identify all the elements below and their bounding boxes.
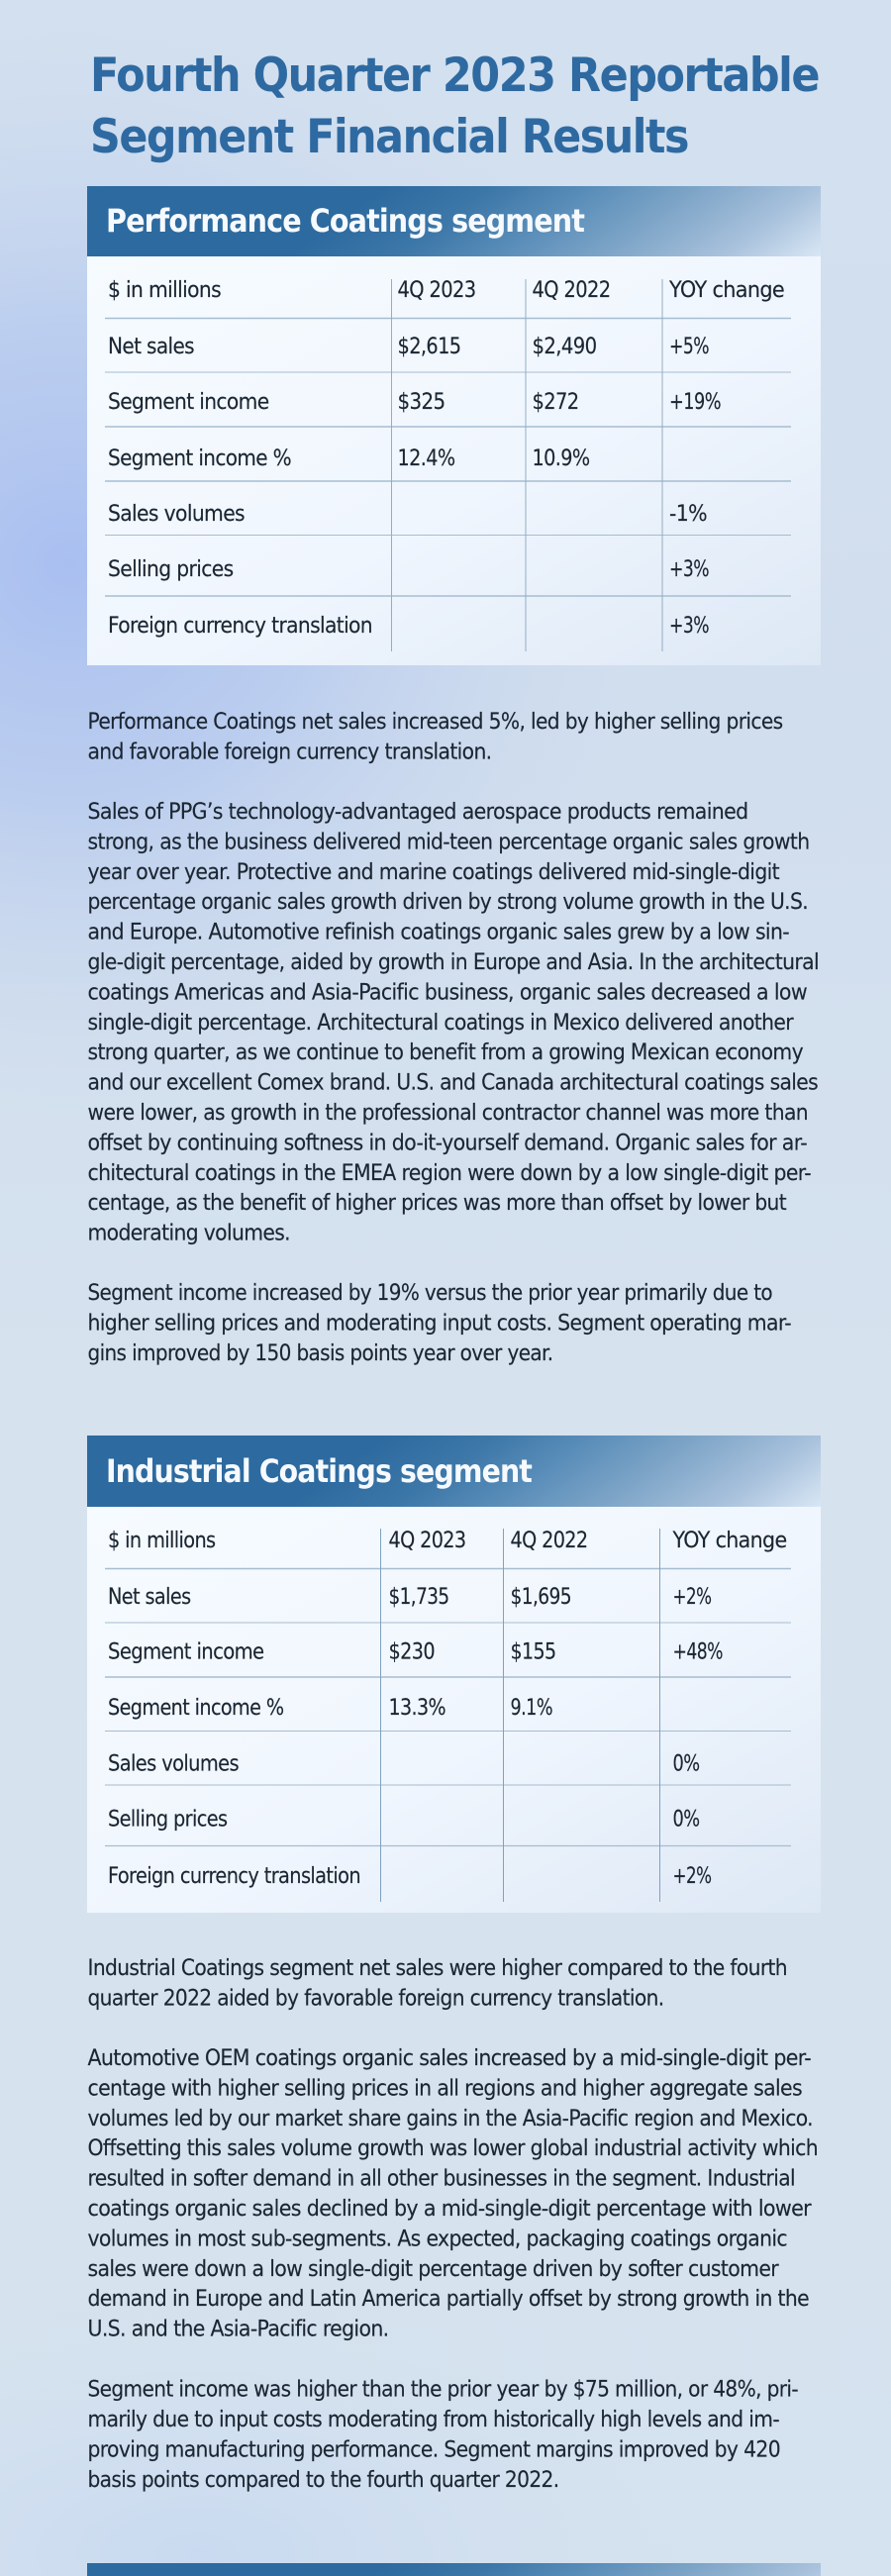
text block: Performance Coatings net sales summary: Performance Coatings net sales increased 5%, led by higher selling prices [87,710,783,735]
table column: 4Q 2022: 4Q 2022 [511,1529,588,1553]
table column: 4Q 2022: $155 [511,1640,556,1665]
table row labels: Segment income % [108,1696,283,1721]
table column: YOY change: +19% [669,390,721,415]
table column: 4Q 2022: 9.1% [511,1696,552,1721]
text block: Performance Coatings business detail [87,800,819,1246]
table column: 4Q 2022: 4Q 2022 [533,278,610,303]
title: Fourth Quarter 2023 Reportable [90,49,819,103]
table row labels: Foreign currency translation [108,614,372,639]
text block: Industrial Coatings segment income: marily due to input costs moderating from historically high levels and im- [87,2408,779,2432]
text block: Industrial Coatings business detail [87,2046,818,2342]
table column: 4Q 2022 [511,1529,588,1721]
table column: YOY change: YOY change [668,278,784,303]
text block: Industrial Coatings business detail: U.S. and the Asia-Pacific region. [87,2318,388,2342]
text block: Industrial Coatings segment income [87,2378,798,2493]
text block: Industrial Coatings net sales summary: Industrial Coatings segment net sales were higher compared to the fourth [87,1956,787,1981]
table row labels: $ in millions [108,1529,216,1553]
table row labels: Segment income [108,1640,264,1665]
table row labels: Net sales [108,1585,191,1610]
table column: 4Q 2022 [533,278,610,471]
text block: Performance Coatings segment income: higher selling prices and moderating input costs. Segment operating mar- [87,1311,791,1337]
text block: Performance Coatings business detail: single-digit percentage. Architectural coatings in Mexico delivered another [87,1011,795,1036]
table row labels: Foreign currency translation [108,1864,360,1889]
text block: Performance Coatings business detail: and our excellent Comex brand. U.S. and Canada architectural coatings sales [87,1071,818,1096]
table column: 4Q 2023 [388,1529,465,1721]
panel header: Performance Coatings segment [87,186,821,256]
table column: 4Q 2023: 13.3% [388,1696,446,1721]
text block: Performance Coatings business detail: were lower, as growth in the professional contractor channel was more than [87,1101,808,1126]
table column: YOY change: 0% [673,1808,699,1833]
text block: Performance Coatings business detail: year over year. Protective and marine coatings delivered mid-single-digit [87,860,780,885]
text block: Performance Coatings business detail: coatings Americas and Asia-Pacific business, organic sales decreased a low [87,980,808,1005]
text block: Industrial Coatings business detail: sales were down a low single-digit percentage driven by softer customer [87,2257,780,2282]
table column: YOY change [668,278,784,639]
panel header: Industrial Coatings segment: Industrial Coatings segment [106,1452,533,1490]
table row labels: Net sales [108,335,194,359]
table column: YOY change: YOY change [672,1529,787,1553]
panel header: Industrial Coatings segment [87,1436,821,1507]
table column: 4Q 2023: 12.4% [398,446,455,471]
title [90,49,819,164]
text block: Industrial Coatings business detail: demand in Europe and Latin America partially offset by strong growth in the [87,2287,809,2312]
text block: Industrial Coatings net sales summary [87,1956,787,2012]
text block: Industrial Coatings segment income: basis points compared to the fourth quarter 2022. [87,2468,558,2493]
table column: YOY change: +3% [669,557,709,582]
table column: YOY change: +48% [673,1640,723,1665]
text block: Industrial Coatings business detail: volumes in most sub-segments. As expected, packaging coatings organic [87,2227,787,2251]
text block: Performance Coatings business detail: gle-digit percentage, aided by growth in Europe and Asia. In the architectural [87,950,819,975]
panel header: next segment (cut off at page edge) [87,2563,821,2576]
text block: Industrial Coatings business detail: coatings organic sales declined by a mid-single-digit percentage with lower [87,2197,813,2222]
table row labels [108,1529,360,1889]
text block: Industrial Coatings business detail: centage with higher selling prices in all regions and higher aggregate sales [87,2076,802,2101]
text block: Performance Coatings business detail: strong, as the business delivered mid-teen percentage organic sales growth [87,830,810,854]
text block: Performance Coatings business detail: and Europe. Automotive refinish coatings organic sales grew by a low sin- [87,921,789,945]
panel: Industrial Coatings segment table [87,1436,821,1913]
text block: Industrial Coatings business detail: Offsetting this sales volume growth was lower global industrial activity which [87,2136,818,2161]
text block: Performance Coatings business detail: moderating volumes. [87,1222,290,1246]
table row labels: Segment income % [108,446,291,471]
table row labels [108,278,372,639]
table column: YOY change: +5% [669,335,709,359]
table column: 4Q 2023: $2,615 [398,335,461,359]
table column: YOY change: +2% [673,1864,711,1889]
text block: Industrial Coatings business detail: resulted in softer demand in all other businesses in the segment. Industrial [87,2167,795,2192]
text block: Performance Coatings segment income [87,1281,791,1366]
table column: 4Q 2023: 4Q 2023 [398,278,475,303]
table column: 4Q 2022: 10.9% [533,446,590,471]
table column: YOY change: +3% [669,614,709,639]
table row labels: Selling prices [108,1808,228,1833]
table row labels: Sales volumes [108,502,245,527]
text block: Performance Coatings business detail: percentage organic sales growth driven by strong volume growth in the U.S. [87,890,808,915]
table column: 4Q 2023: 4Q 2023 [388,1529,465,1553]
table column: YOY change: 0% [673,1752,699,1777]
text block: Performance Coatings net sales summary [87,710,783,764]
table row labels: Sales volumes [108,1752,239,1777]
table column: YOY change: -1% [669,502,707,527]
table row labels: $ in millions [108,278,221,303]
table column: 4Q 2023 [398,278,475,471]
text block: Industrial Coatings segment income: Segment income was higher than the prior year by $75 million, or 48%, pri- [87,2378,798,2403]
table column: 4Q 2023: $1,735 [388,1585,449,1610]
table column: 4Q 2023: $230 [388,1640,435,1665]
text block: Performance Coatings business detail: centage, as the benefit of higher prices was more than offset by lower but [87,1191,787,1216]
text block: Performance Coatings business detail: chitectural coatings in the EMEA region were down by a low single-digit per- [87,1161,811,1186]
text block: Performance Coatings business detail: offset by continuing softness in do-it-yourself demand. Organic sales for ar- [87,1131,807,1155]
panel: Performance Coatings segment table [87,186,821,665]
text block: Performance Coatings net sales summary: and favorable foreign currency translation. [87,741,491,764]
table row labels: Selling prices [108,557,234,582]
panel header: Performance Coatings segment: Performance Coatings segment [106,202,585,240]
text block: Performance Coatings business detail: strong quarter, as we continue to benefit from a growing Mexican economy [87,1040,804,1065]
text block: Industrial Coatings segment income: proving manufacturing performance. Segment margins improved by 420 [87,2437,780,2462]
text block: Performance Coatings segment income: gins improved by 150 basis points year over year. [87,1341,552,1366]
text block: Industrial Coatings net sales summary: quarter 2022 aided by favorable foreign currency translation. [87,1986,663,2012]
table row labels: Segment income [108,390,269,415]
table column: 4Q 2022: $2,490 [533,335,596,359]
text block: Performance Coatings segment income: Segment income increased by 19% versus the prior year primarily due to [87,1281,772,1306]
table column: 4Q 2022: $1,695 [511,1585,571,1610]
text block: Performance Coatings business detail: Sales of PPG’s technology-advantaged aerospace products remained [87,800,748,825]
title: Segment Financial Results [90,110,688,164]
table column: 4Q 2023: $325 [398,390,446,415]
text block: Industrial Coatings business detail: Automotive OEM coatings organic sales increased by a mid-single-digit per- [87,2046,811,2071]
table column: YOY change [672,1529,787,1889]
table column: YOY change: +2% [673,1585,711,1610]
table column: 4Q 2022: $272 [533,390,578,415]
text block: Industrial Coatings business detail: volumes led by our market share gains in the Asia-Pacific region and Mexico. [87,2107,813,2131]
